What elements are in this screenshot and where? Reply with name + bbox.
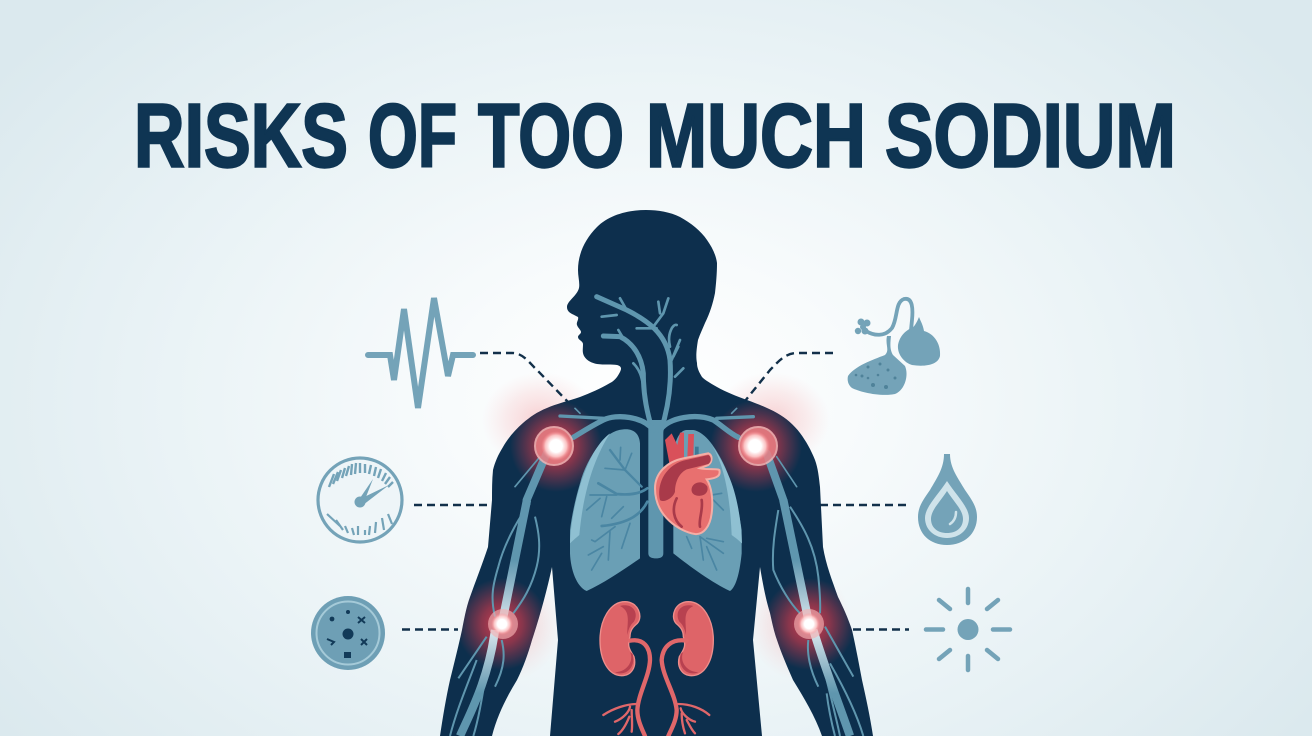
trachea: [648, 420, 663, 558]
ureters: [603, 640, 709, 736]
outer red halos around joints: [458, 372, 852, 680]
bronchi: [587, 447, 723, 570]
icon: heartbeat line: [368, 298, 473, 408]
title: RISKS: [134, 86, 348, 186]
connector lines: [402, 353, 909, 630]
heart: [655, 433, 720, 534]
arm vessels: [450, 500, 863, 736]
vessels: neck and shoulder branches: [515, 297, 797, 500]
title: OF: [368, 86, 457, 186]
title: SODIUM: [885, 86, 1176, 186]
kidneys: [600, 602, 713, 736]
title: MUCH: [646, 86, 866, 186]
inner red glows clipped to body: [456, 400, 855, 670]
human body silhouette: [440, 210, 873, 736]
right kidney: [673, 602, 713, 676]
title: [134, 86, 1176, 186]
icon: gland organs: [848, 299, 940, 395]
icon: microbe disc: [311, 596, 385, 670]
icon: sun: [926, 589, 1010, 670]
joint highlights: [488, 427, 824, 639]
left kidney: [600, 602, 640, 676]
lungs: [570, 420, 742, 591]
icon: gauge dial: [318, 458, 402, 542]
title: TOO: [478, 86, 624, 186]
icon: water drop: [918, 454, 977, 545]
